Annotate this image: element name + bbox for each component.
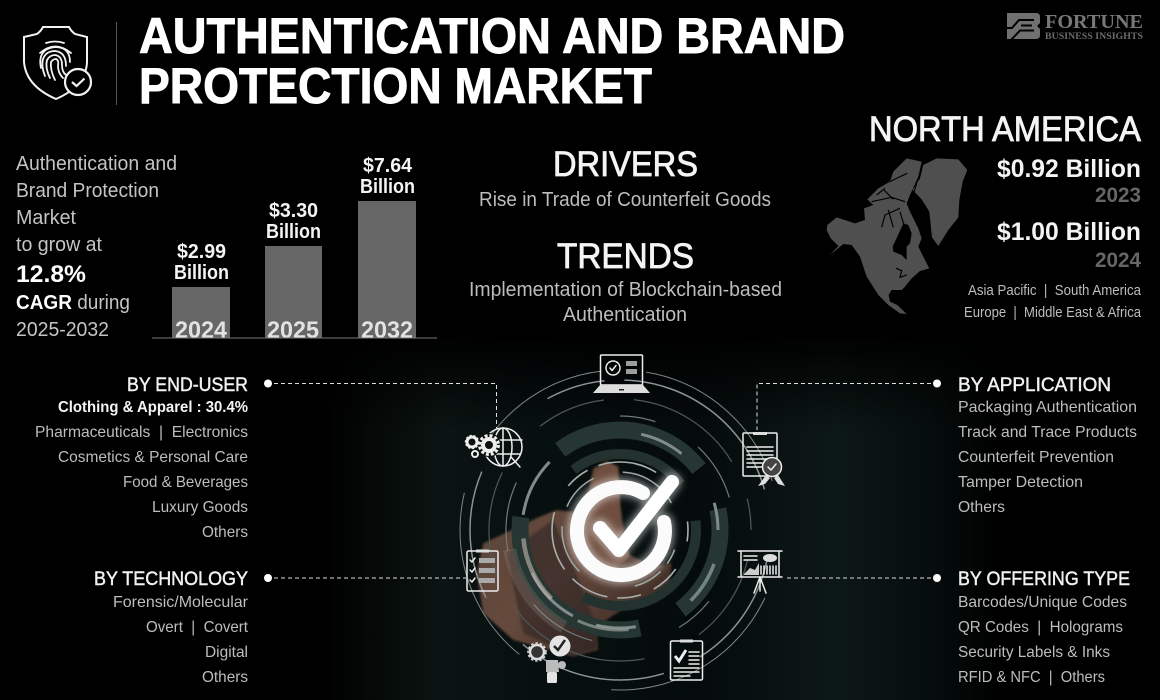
text: CAGR summary: to grow at (16, 234, 102, 256)
panel: by end-user: Cosmetics & Personal Care (58, 449, 248, 466)
bar 2024: Billion (174, 262, 229, 284)
logo: Fortune Business Insights: FORTUNE (1045, 11, 1143, 33)
north america stats: $0.92 Billion (997, 155, 1141, 183)
divider (116, 22, 117, 105)
bar 2032: 2032 (361, 317, 413, 344)
panel: by offering type: QR Codes | Holograms (958, 619, 1123, 636)
panel: by application: Others (958, 499, 1005, 516)
title: AUTHENTICATION AND BRAND (139, 8, 845, 64)
hand (477, 461, 672, 657)
panel: by technology (94, 569, 249, 686)
panel: by end-user (35, 375, 248, 541)
icon: lightbulb with gears (528, 636, 570, 683)
connector: technology (264, 574, 466, 582)
panel: by application: Track and Trace Products (958, 424, 1137, 441)
trends: Authentication (563, 304, 687, 326)
panel: by offering type: BY OFFERING TYPE (958, 569, 1130, 590)
icon: gears and globe (466, 428, 522, 467)
rings (460, 370, 780, 690)
title (139, 8, 845, 114)
bar 2032: $7.64 (363, 155, 413, 177)
logo: Fortune Business Insights: BUSINESS INSIGHTS (1045, 32, 1143, 42)
connector: offering type (785, 574, 941, 582)
drivers (479, 145, 771, 211)
panel: by offering type: Barcodes/Unique Codes (958, 594, 1127, 611)
text: CAGR summary: Brand Protection (16, 180, 159, 202)
text: CAGR summary: 12.8% (16, 261, 86, 288)
bar 2024: 2024 (175, 317, 228, 344)
north america stats: Europe | Middle East & Africa (964, 305, 1142, 321)
panel: by end-user: Clothing & Apparel : 30.4% (58, 399, 248, 416)
trends: TRENDS (557, 237, 694, 276)
panel: by technology: BY TECHNOLOGY (94, 569, 248, 590)
north america stats: $1.00 Billion (997, 218, 1141, 246)
bar 2032 (358, 155, 416, 344)
text: CAGR summary: CAGR during (16, 292, 130, 314)
text: CAGR summary: Authentication and (16, 153, 177, 175)
icon: fingerprint shield (24, 27, 91, 99)
north america stats: 2024 (1095, 249, 1141, 272)
title: PROTECTION MARKET (139, 58, 652, 114)
bar chart (152, 155, 437, 344)
north america stats: NORTH AMERICA (869, 110, 1142, 149)
panel: by application: Tamper Detection (958, 474, 1083, 491)
bar 2025 (265, 200, 322, 344)
panel: by application: Packaging Authentication (958, 399, 1137, 416)
bar 2032: Billion (360, 176, 415, 198)
map: North America (827, 158, 967, 314)
panel: by end-user: Food & Beverages (123, 474, 248, 491)
north america stats: Asia Pacific | South America (968, 283, 1142, 299)
trends: Implementation of Blockchain-based (469, 279, 782, 301)
text: CAGR summary (16, 153, 177, 341)
bar 2025: $3.30 (269, 200, 318, 222)
panel: by end-user: Luxury Goods (152, 499, 248, 516)
panel: by end-user: BY END-USER (127, 375, 248, 396)
central hand and target graphic (460, 370, 780, 690)
glowing check (577, 482, 672, 575)
text: CAGR summary: 2025-2032 (16, 319, 109, 341)
text: CAGR summary: Market (16, 207, 76, 229)
icon: presentation board (738, 551, 782, 593)
bar 2025: Billion (266, 221, 321, 243)
bar 2024: $2.99 (177, 241, 226, 263)
panel: by technology: Overt | Covert (146, 619, 249, 636)
panel: by technology: Others (202, 669, 248, 686)
north america stats (869, 110, 1142, 321)
drivers: DRIVERS (553, 145, 698, 184)
connector: application (757, 380, 941, 430)
icon: checklist (467, 550, 498, 591)
bar 2025: 2025 (267, 317, 319, 344)
drivers: Rise in Trade of Counterfeit Goods (479, 189, 771, 211)
panel: by technology: Digital (205, 644, 248, 661)
panel: by application (958, 375, 1137, 516)
connector: end-user (264, 380, 496, 430)
panel: by offering type (958, 569, 1130, 686)
icon: clipboard (670, 640, 702, 680)
panel: by end-user: Others (202, 524, 248, 541)
bar 2024 (172, 241, 230, 344)
icon: laptop (593, 355, 650, 393)
panel: by offering type: Security Labels & Inks (958, 644, 1110, 661)
panel: by offering type: RFID & NFC | Others (958, 669, 1105, 686)
panel: by application: Counterfeit Prevention (958, 449, 1114, 466)
logo: Fortune Business Insights (1006, 11, 1143, 42)
trends (469, 237, 782, 326)
panel: by technology: Forensic/Molecular (113, 594, 249, 611)
north america stats: 2023 (1095, 184, 1141, 207)
icon: certificate (743, 432, 785, 486)
panel: by application: BY APPLICATION (958, 375, 1111, 396)
panel: by end-user: Pharmaceuticals | Electronics (35, 424, 248, 441)
